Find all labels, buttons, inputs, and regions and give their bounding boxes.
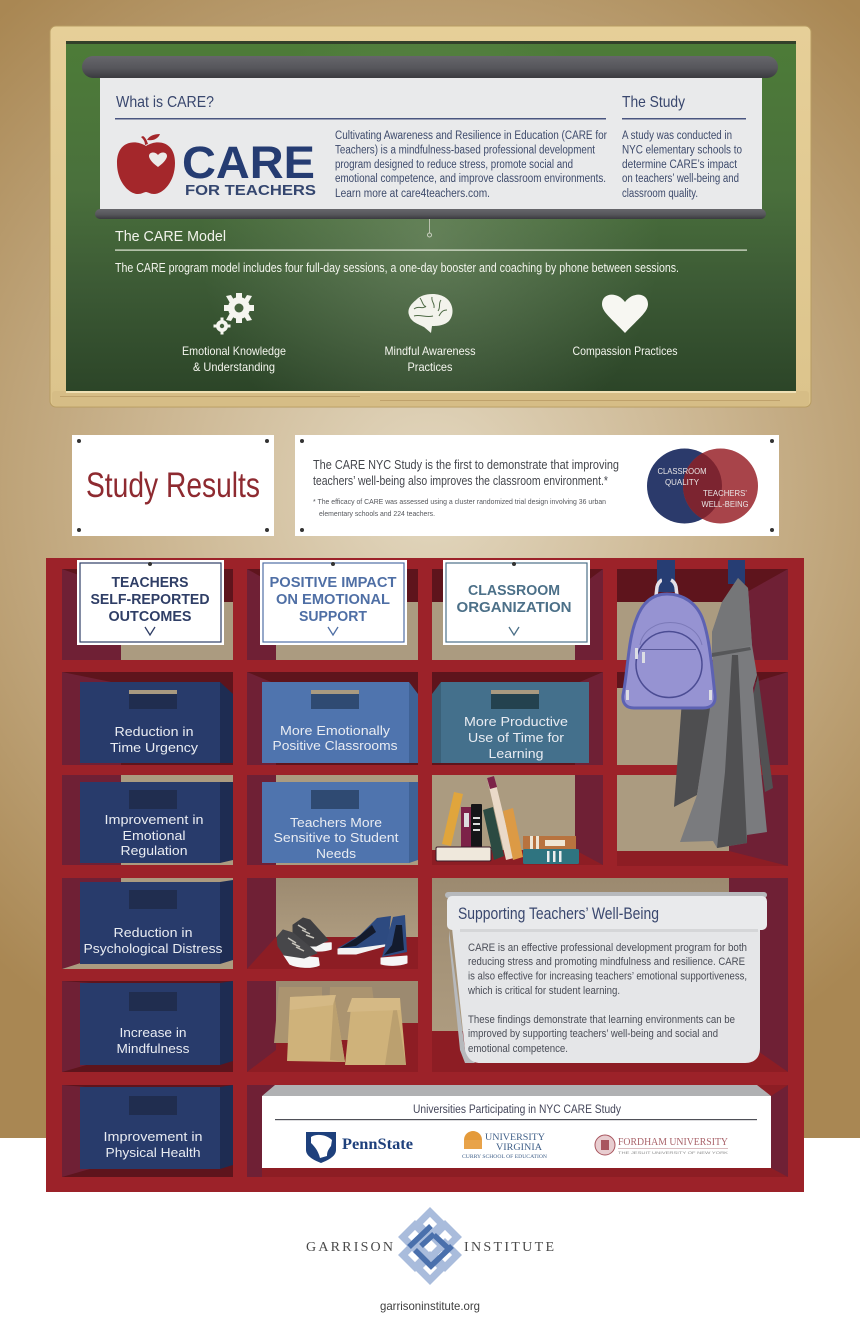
upper roller xyxy=(82,56,778,78)
heading: The Study xyxy=(622,94,746,120)
text block: the study xyxy=(622,130,742,200)
text block: CARE description: Learn more at care4teachers.com. xyxy=(335,188,490,200)
heading: Supporting Teachers’ Well-Being xyxy=(458,904,659,923)
drawer: Teachers More Sensitive to Student Needs: Teachers More xyxy=(290,815,382,830)
logo: University of Virginia: CURRY SCHOOL OF EDUCATION xyxy=(462,1154,547,1160)
logo: University of Virginia: VIRGINIA xyxy=(496,1143,542,1153)
label: Compassion Practices: Compassion Practices xyxy=(572,344,678,358)
drawer: Reduction in Psychological Distress: Reduction in xyxy=(114,925,192,940)
drawer: Increase in Mindfulness xyxy=(80,981,233,1065)
text: footnote: elementary schools and 224 teachers. xyxy=(319,509,435,518)
drawer: More Productive Use of Time for Learning: Learning xyxy=(488,746,544,761)
text block: the study: determine CARE’s impact xyxy=(622,159,738,171)
drawer: Improvement in Physical Health xyxy=(80,1085,233,1169)
drawer: Reduction in Psychological Distress: Psychological Distress xyxy=(84,941,223,956)
drawer: Improvement in Physical Health: Improvement in xyxy=(104,1129,202,1144)
text: summary: The CARE NYC Study is the first to demonstrate that improving xyxy=(313,457,619,472)
drawer: Reduction in Time Urgency xyxy=(80,682,233,763)
drawer: Increase in Mindfulness: Increase in xyxy=(120,1025,186,1040)
label: Emotional Knowledge: Emotional Knowledge xyxy=(182,344,286,358)
wooden frame xyxy=(50,26,811,407)
text block: emotional competence. xyxy=(468,1043,568,1055)
text: footnote: * The efficacy of CARE was assessed using a cluster randomized trial design involving 36 urban xyxy=(313,497,606,506)
label: Mindful Awareness: Practices xyxy=(408,360,452,374)
heading: The CARE Model: The CARE Model xyxy=(115,228,226,245)
text block xyxy=(467,942,747,1055)
drawer: More Emotionally Positive Classrooms xyxy=(262,682,418,763)
text block: improved by supporting teachers’ well-being and social and xyxy=(468,1028,718,1040)
pull-down screen xyxy=(100,78,762,210)
illustration: books xyxy=(436,776,579,864)
text block: is also effective for increasing teachers’ emotional supportiveness, xyxy=(468,970,747,982)
chart: venn diagram xyxy=(647,448,758,524)
drawer: Increase in Mindfulness: Mindfulness xyxy=(116,1041,190,1056)
text block: reducing stress and promoting mindfulness and resilience. CARE xyxy=(468,956,745,968)
text block: CARE is an effective professional development program for both xyxy=(468,942,747,954)
text: website: garrisoninstitute.org xyxy=(380,1299,480,1313)
label: Emotional Knowledge: & Understanding xyxy=(193,360,275,374)
drawer: Improvement in Emotional Regulation: Emotional xyxy=(122,828,186,843)
large lower right cubby xyxy=(432,878,788,1072)
logo: CARE for Teachers xyxy=(117,134,316,199)
panel: study summary card xyxy=(295,435,779,536)
text block: These findings demonstrate that learning environments can be xyxy=(468,1014,735,1026)
icon: apple with heart xyxy=(117,134,175,194)
logo: University of Virginia xyxy=(462,1131,547,1160)
text block: CARE description: emotional competence, and improve classroom environments. xyxy=(335,173,606,185)
drawer: Teachers More Sensitive to Student Needs: Sensitive to Student xyxy=(274,830,399,845)
label card: Teachers Self-Reported Outcomes: OUTCOMES xyxy=(108,609,192,625)
label card: Positive Impact on Emotional Support: POSITIVE IMPACT xyxy=(270,575,397,591)
logo: Fordham University xyxy=(595,1135,728,1155)
drawer: More Emotionally Positive Classrooms: Positive Classrooms xyxy=(272,738,398,753)
panel: Supporting Teachers' Well-Being bin xyxy=(445,892,767,1063)
panel: cubby shelf xyxy=(46,558,804,1192)
panel: chalkboard xyxy=(50,26,811,407)
drawer: Reduction in Time Urgency: Time Urgency xyxy=(110,740,199,755)
label: Mindful Awareness: Mindful Awareness xyxy=(384,344,476,358)
logo: Penn State xyxy=(306,1132,413,1163)
heading: The Study: The Study xyxy=(622,94,685,111)
text block: which is critical for student learning. xyxy=(467,985,620,997)
drawer: More Productive Use of Time for Learning: Use of Time for xyxy=(468,730,565,745)
chart: venn diagram: WELL-BEING xyxy=(702,499,748,509)
icon: gears xyxy=(214,293,254,334)
heading: Study Results: Study Results xyxy=(86,466,260,505)
label: Mindful Awareness xyxy=(384,344,476,374)
drawer: Reduction in Psychological Distress xyxy=(80,880,233,964)
illustration: paper lunch bags xyxy=(274,987,406,1065)
drawer: More Productive Use of Time for Learning xyxy=(432,682,589,763)
drawer: Improvement in Emotional Regulation xyxy=(80,782,233,863)
text: summary xyxy=(313,457,619,488)
text block: the study: classroom quality. xyxy=(622,188,698,200)
chart: venn diagram: CLASSROOM xyxy=(658,466,706,476)
label card: Teachers Self-Reported Outcomes: SELF-REPORTED xyxy=(90,592,210,608)
icon: heart xyxy=(602,295,648,333)
text block: the study: A study was conducted in xyxy=(622,130,732,142)
text block: CARE description: Teachers) is a mindfulness-based professional development xyxy=(335,144,596,156)
icon: endless knot xyxy=(403,1212,457,1280)
heading: What is CARE?: What is CARE? xyxy=(116,94,214,111)
row 1 cubbies xyxy=(62,569,788,660)
text block: the study: NYC elementary schools to xyxy=(622,144,742,156)
footer: Garrison Institute logo xyxy=(306,1212,554,1313)
drawer: Teachers More Sensitive to Student Needs: Needs xyxy=(316,846,357,861)
text: summary: teachers’ well-being also improves the classroom environment.* xyxy=(313,473,608,488)
label card: Classroom Organization: ORGANIZATION xyxy=(456,600,572,616)
drawer: More Productive Use of Time for Learning: More Productive xyxy=(464,714,568,729)
label: Emotional Knowledge xyxy=(182,344,286,374)
chart: venn diagram: QUALITY xyxy=(665,477,699,487)
label card: Positive Impact on Emotional Support: SUPPORT xyxy=(299,609,367,625)
label card: Positive Impact on Emotional Support xyxy=(260,560,407,645)
logo: CARE for Teachers: FOR TEACHERS xyxy=(185,183,316,199)
logo: Fordham University: THE JESUIT UNIVERSITY OF NEW YORK xyxy=(618,1150,728,1155)
logo: Penn State: PennState xyxy=(342,1136,413,1153)
label card: Teachers Self-Reported Outcomes: TEACHERS xyxy=(112,575,189,591)
label card: Teachers Self-Reported Outcomes xyxy=(77,560,224,645)
drawer: Improvement in Physical Health: Physical Health xyxy=(106,1145,200,1160)
drawer: Teachers More Sensitive to Student Needs xyxy=(262,782,418,863)
text block: CARE description: program designed to reduce stress, promote social and xyxy=(335,159,573,171)
chart: venn diagram: TEACHERS’ xyxy=(703,488,747,498)
text block: CARE description: Cultivating Awareness and Resilience in Education (CARE for xyxy=(335,130,607,142)
row 2 cubbies xyxy=(62,672,788,765)
lower rod with pull cord xyxy=(95,209,766,237)
text: model description: The CARE program model includes four full-day sessions, a one-day booster and coaching by phone between sessions. xyxy=(115,261,679,275)
panel: Study Results card xyxy=(72,435,274,536)
bottom wide cubby xyxy=(247,1085,788,1177)
footer: Garrison Institute logo: INSTITUTE xyxy=(464,1240,554,1255)
footer: Garrison Institute logo: GARRISON xyxy=(306,1240,393,1255)
illustration: coat on hook xyxy=(674,560,773,848)
drawer: Improvement in Emotional Regulation: Improvement in xyxy=(104,812,204,827)
drawer: More Emotionally Positive Classrooms: More Emotionally xyxy=(280,723,391,738)
logo: University of Virginia: UNIVERSITY xyxy=(485,1133,545,1143)
label card: Classroom Organization: CLASSROOM xyxy=(468,583,560,599)
icon: brain xyxy=(408,294,453,333)
green board xyxy=(66,41,796,391)
illustration: sneakers xyxy=(277,915,407,967)
heading: Universities Participating in NYC CARE Study xyxy=(413,1104,621,1116)
drawer: Reduction in Time Urgency: Reduction in xyxy=(114,724,194,739)
text block: CARE description xyxy=(335,130,607,200)
logo: Fordham University: FORDHAM UNIVERSITY xyxy=(618,1137,728,1148)
text block: the study: on teachers’ well-being and xyxy=(622,173,739,185)
label card: Classroom Organization xyxy=(443,560,590,645)
drawer: Improvement in Emotional Regulation: Regulation xyxy=(120,843,188,858)
label card: Positive Impact on Emotional Support: ON EMOTIONAL xyxy=(276,592,390,608)
logo: CARE for Teachers: CARE xyxy=(182,137,315,188)
illustration: backpack xyxy=(623,560,715,708)
row 4 and 5 left cubbies xyxy=(62,878,418,1177)
panel: universities bin xyxy=(262,1085,771,1168)
row 3 cubbies xyxy=(62,775,788,866)
text: footnote xyxy=(313,497,606,518)
